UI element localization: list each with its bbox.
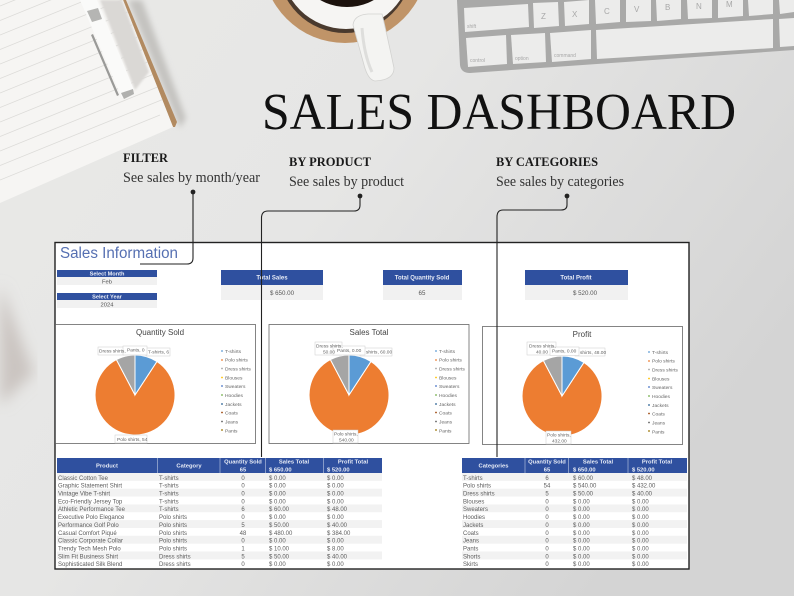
keyboard: Z: [541, 12, 546, 21]
table rows: $ 40.00: [327, 523, 348, 529]
table rows: Hoodies: [463, 515, 485, 521]
legend: Pants: [439, 428, 452, 434]
keyboard: V: [634, 5, 640, 14]
table rows: $ 0.00: [632, 499, 649, 505]
filter: select month: Select Month: [90, 272, 125, 278]
table header: $ 520.00: [327, 468, 350, 474]
table rows: $ 480.00: [269, 531, 293, 537]
callout: filter: See sales by month/year: [123, 170, 260, 186]
table rows: $ 0.00: [632, 523, 649, 529]
table rows: $ 0.00: [327, 562, 344, 568]
arrow: filter connector: [140, 190, 195, 264]
table rows: T-shirts: [159, 476, 179, 482]
table rows: 5: [241, 523, 245, 529]
coffee cup on cork coaster: [262, 0, 428, 81]
table rows: $ 0.00: [269, 476, 286, 482]
table: by categories: [462, 458, 687, 568]
table rows: $ 0.00: [327, 499, 344, 505]
table rows: T-shirts: [159, 492, 179, 498]
keyboard: C: [604, 7, 610, 16]
legend: Jeans: [439, 420, 453, 426]
callout: filter: FILTER: [123, 150, 169, 165]
table rows: 0: [241, 562, 245, 568]
callout: by product: [289, 154, 404, 190]
chart: sales total pie: Pants, 0.00: [337, 348, 362, 354]
legend: Jeans: [652, 421, 666, 427]
table rows: Polo shirts: [159, 523, 187, 529]
table rows: Polo shirts: [159, 539, 187, 545]
table rows: $ 0.00: [573, 531, 590, 537]
table rows: Polo shirts: [463, 484, 491, 490]
legend: Pants: [225, 428, 238, 434]
table rows: Eco-Friendly Jersey Top: [58, 499, 123, 505]
table rows: Dress shirts: [159, 562, 191, 568]
table header: Quantity Sold: [224, 460, 262, 466]
table header: 65: [544, 468, 551, 474]
table rows: T-shirts: [463, 476, 483, 482]
keyboard: N: [696, 2, 702, 11]
filter: select month: Feb: [102, 280, 112, 286]
table rows: T-shirts: [159, 499, 179, 505]
kpi: total profit: [525, 270, 628, 300]
table rows: 0: [241, 492, 245, 498]
filter: select year: [57, 293, 157, 308]
table rows: 0: [241, 539, 245, 545]
table rows: $ 40.00: [632, 492, 653, 498]
table rows: Executive Polo Elegance: [58, 515, 125, 521]
chart: quantity sold pie: Quantity Sold: [136, 328, 184, 337]
table rows: $ 0.00: [269, 539, 286, 545]
table rows: $ 8.00: [327, 546, 344, 552]
title: SALES DASHBOARD: [262, 84, 736, 141]
legend: T-shirts: [439, 349, 456, 355]
filter: select year: 2024: [101, 302, 114, 308]
panel heading: Sales Information: [60, 245, 178, 262]
chart: profit pie: Pants, 0.00: [552, 348, 577, 354]
legend: Coats: [225, 411, 238, 417]
table rows: $ 0.00: [632, 562, 649, 568]
table header: Profit Total: [642, 460, 672, 466]
table rows: $ 0.00: [573, 507, 590, 513]
callout: by categories: [496, 154, 624, 190]
legend: Blouses: [652, 376, 670, 382]
legend: [435, 349, 465, 434]
chart: profit pie: Dress shirts,: [529, 344, 556, 350]
table header: [479, 460, 672, 474]
table rows: $ 10.00: [269, 546, 290, 552]
legend: T-shirts: [652, 350, 669, 356]
table rows: Coats: [463, 531, 479, 537]
legend: Coats: [652, 412, 665, 418]
table rows: $ 0.00: [573, 562, 590, 568]
table header: Product: [96, 464, 118, 470]
legend: Blouses: [225, 375, 243, 381]
legend: Coats: [439, 411, 452, 417]
table rows: 5: [241, 554, 245, 560]
legend: Hoodies: [652, 394, 670, 400]
table rows: 0: [545, 531, 549, 537]
keyboard: shift: [467, 24, 477, 30]
kpi: total profit: $ 520.00: [573, 290, 598, 297]
table header: $ 520.00: [632, 468, 655, 474]
table rows: Slim Fit Business Shirt: [58, 554, 118, 560]
callout: by product: See sales by product: [289, 174, 404, 190]
legend: Pants: [652, 429, 665, 435]
table rows: $ 0.00: [632, 546, 649, 552]
arrow: product connector: [262, 194, 362, 457]
legend: Polo shirts: [225, 358, 248, 364]
legend: Blouses: [439, 375, 457, 381]
chart: profit pie: shirts, 48.00: [580, 350, 606, 356]
table rows: Jeans: [463, 539, 479, 545]
table rows: $ 60.00: [573, 476, 594, 482]
chart: sales total pie: 50.00: [323, 350, 335, 356]
table: by product: [57, 458, 382, 568]
blurred object at left edge: [0, 285, 34, 405]
table header: [96, 460, 368, 474]
table rows: Shorts: [463, 554, 480, 560]
legend: Dress shirts: [439, 366, 465, 372]
table rows: $ 0.00: [269, 562, 286, 568]
callout: by categories: BY CATEGORIES: [496, 154, 598, 169]
table rows: $ 0.00: [632, 507, 649, 513]
keyboard: M: [726, 0, 733, 9]
table rows: Dress shirts: [463, 492, 495, 498]
table header: Sales Total: [279, 460, 309, 466]
table rows: $ 384.00: [327, 531, 351, 537]
kpi: total quantity sold: 65: [419, 290, 426, 297]
legend: T-shirts: [225, 349, 242, 355]
table rows: $ 50.00: [573, 492, 594, 498]
table rows: Classic Cotton Tee: [58, 476, 109, 482]
table rows: 0: [545, 523, 549, 529]
table rows: $ 48.00: [327, 507, 348, 513]
keyboard: [457, 0, 794, 73]
legend: Jeans: [225, 420, 239, 426]
table rows: 6: [241, 507, 245, 513]
keyboard: X: [572, 10, 578, 19]
table rows: $ 540.00: [573, 484, 597, 490]
kpi: total sales: [221, 270, 323, 300]
callout: filter: [123, 150, 260, 186]
chart: quantity sold pie: [56, 324, 256, 444]
legend: [221, 349, 251, 434]
chart: quantity sold pie: Dress shirts,: [99, 348, 126, 354]
table rows: $ 0.00: [573, 523, 590, 529]
legend: Hoodies: [439, 393, 457, 399]
table rows: $ 0.00: [327, 515, 344, 521]
table rows: Blouses: [463, 499, 484, 505]
table rows: Graphic Statement Shirt: [58, 484, 122, 490]
chart: sales total pie: Polo shirts,: [334, 432, 358, 438]
table rows: $ 60.00: [269, 507, 290, 513]
legend: Jackets: [439, 402, 456, 408]
table rows: 48: [240, 531, 247, 537]
table rows: Pants: [463, 546, 478, 552]
table rows: $ 50.00: [269, 523, 290, 529]
table rows: $ 40.00: [327, 554, 348, 560]
table rows: $ 0.00: [632, 515, 649, 521]
legend: Dress shirts: [225, 366, 251, 372]
chart: quantity sold pie: Pants, 0: [127, 348, 145, 354]
table rows: $ 0.00: [327, 539, 344, 545]
legend: [648, 350, 678, 435]
legend: Sweaters: [225, 384, 246, 390]
table rows: $ 0.00: [269, 499, 286, 505]
table header: $ 650.00: [573, 468, 596, 474]
keyboard: control: [470, 58, 485, 64]
table rows: Polo shirts: [159, 531, 187, 537]
kpi: total sales: Total Sales: [256, 276, 288, 282]
table rows: $ 0.00: [632, 531, 649, 537]
table rows: 0: [545, 499, 549, 505]
table rows: $ 0.00: [269, 515, 286, 521]
chart: profit pie: 432.00: [552, 438, 567, 444]
table rows: 6: [545, 476, 549, 482]
chart: profit pie: [482, 326, 682, 444]
table rows: [463, 476, 656, 568]
table rows: $ 48.00: [632, 476, 653, 482]
arrow: categories connector: [497, 194, 569, 457]
table rows: Performance Golf Polo: [58, 523, 119, 529]
chart: sales total pie: 540.00: [339, 438, 354, 444]
table rows: 0: [241, 476, 245, 482]
table rows: 0: [545, 507, 549, 513]
table rows: 0: [241, 515, 245, 521]
table rows: 0: [545, 515, 549, 521]
table header: $ 650.00: [269, 468, 292, 474]
chart: sales total pie: shirts, 60.00: [366, 350, 392, 356]
chart: quantity sold pie: T-shirts, 6: [148, 350, 169, 356]
table rows: 5: [545, 492, 549, 498]
table rows: $ 0.00: [573, 546, 590, 552]
table rows: 1: [241, 546, 245, 552]
table rows: 0: [241, 499, 245, 505]
kpi: total sales: $ 650.00: [270, 290, 295, 297]
table rows: Vintage Vibe T-shirt: [58, 492, 110, 498]
table rows: $ 0.00: [269, 484, 286, 490]
table rows: Polo shirts: [159, 546, 187, 552]
table rows: $ 0.00: [269, 492, 286, 498]
table rows: $ 50.00: [269, 554, 290, 560]
legend: Polo shirts: [652, 359, 675, 365]
table rows: 54: [544, 484, 551, 490]
table rows: Polo shirts: [159, 515, 187, 521]
table header: 65: [240, 468, 247, 474]
table rows: Jackets: [463, 523, 483, 529]
table header: Profit Total: [338, 460, 368, 466]
kpi: total profit: Total Profit: [560, 276, 592, 282]
legend: Hoodies: [225, 393, 243, 399]
table header: Quantity Sold: [528, 460, 566, 466]
table rows: $ 0.00: [573, 515, 590, 521]
chart: profit pie: Profit: [573, 330, 592, 339]
table rows: 0: [241, 484, 245, 490]
chart: profit pie: 40.00: [536, 350, 548, 356]
table rows: Classic Corporate Collar: [58, 539, 123, 545]
keyboard: option: [515, 56, 529, 62]
legend: Jackets: [225, 402, 242, 408]
keyboard: B: [665, 3, 670, 12]
chart: sales total pie: [269, 324, 469, 444]
chart: sales total pie: Dress shirts,: [316, 344, 343, 350]
table rows: $ 0.00: [632, 539, 649, 545]
chart: profit pie: Polo shirts,: [547, 432, 571, 438]
notebook with pen: [0, 0, 186, 203]
table rows: 0: [545, 562, 549, 568]
table rows: Trendy Tech Mesh Polo: [58, 546, 121, 552]
table rows: T-shirts: [159, 484, 179, 490]
table rows: Dress shirts: [159, 554, 191, 560]
table header: Sales Total: [583, 460, 613, 466]
kpi: total quantity sold: [383, 270, 462, 300]
table header: Category: [176, 464, 202, 470]
table rows: $ 0.00: [327, 492, 344, 498]
legend: Sweaters: [439, 384, 460, 390]
table rows: 0: [545, 539, 549, 545]
table rows: $ 0.00: [573, 554, 590, 560]
table rows: Sophisticated Silk Blend: [58, 562, 122, 568]
legend: Polo shirts: [439, 358, 462, 364]
chart: quantity sold pie: Polo shirts, 54: [117, 437, 148, 443]
legend: Jackets: [652, 403, 669, 409]
table rows: Athletic Performance Tee: [58, 507, 126, 513]
panel: sales information dashboard: [55, 242, 689, 569]
filter: select month: [57, 270, 157, 286]
table rows: $ 0.00: [573, 539, 590, 545]
table rows: $ 0.00: [632, 554, 649, 560]
legend: Sweaters: [652, 385, 673, 391]
legend: Dress shirts: [652, 368, 678, 374]
keyboard: command: [554, 53, 576, 59]
table rows: $ 0.00: [573, 499, 590, 505]
table rows: T-shirts: [159, 507, 179, 513]
callout: by categories: See sales by categories: [496, 174, 624, 190]
table rows: $ 0.00: [327, 476, 344, 482]
table rows: Sweaters: [463, 507, 488, 513]
table rows: [58, 476, 351, 568]
kpi: total quantity sold: Total Quantity Sold: [395, 276, 450, 282]
table rows: Casual Comfort Piqué: [58, 531, 117, 537]
table rows: 0: [545, 554, 549, 560]
chart: sales total pie: Sales Total: [350, 328, 389, 337]
callout: by product: BY PRODUCT: [289, 154, 371, 169]
table header: Categories: [479, 464, 508, 470]
table rows: $ 432.00: [632, 484, 656, 490]
table rows: $ 0.00: [327, 484, 344, 490]
table rows: Skirts: [463, 562, 478, 568]
filter: select year: Select Year: [92, 294, 123, 300]
table rows: 0: [545, 546, 549, 552]
